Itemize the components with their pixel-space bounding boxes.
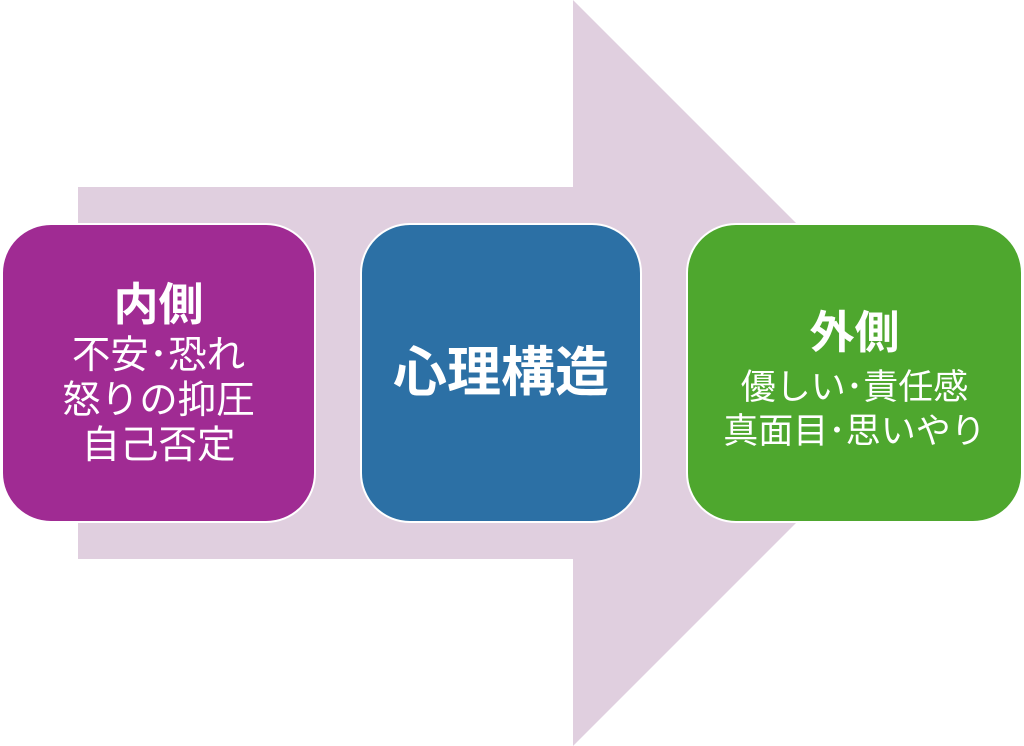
text block: inner side items: 怒りの抑圧 (62, 379, 255, 422)
panel: psychological structure (360, 223, 642, 523)
heading: psychological structure: 心理構造 (393, 343, 609, 403)
heading: outer side: 外側 (809, 307, 900, 358)
panel: outer side (686, 223, 1023, 523)
text block: inner side items (62, 334, 255, 467)
text block: outer side items: 優しい･責任感 (741, 368, 968, 407)
text block: inner side items: 自己否定 (81, 424, 236, 467)
text block: outer side items: 真面目･思いやり (723, 412, 986, 450)
text block: outer side items (723, 368, 986, 450)
text block: inner side items: 不安･恐れ (72, 334, 245, 377)
panel: inner side (1, 223, 316, 523)
heading: inner side: 内側 (113, 279, 204, 330)
